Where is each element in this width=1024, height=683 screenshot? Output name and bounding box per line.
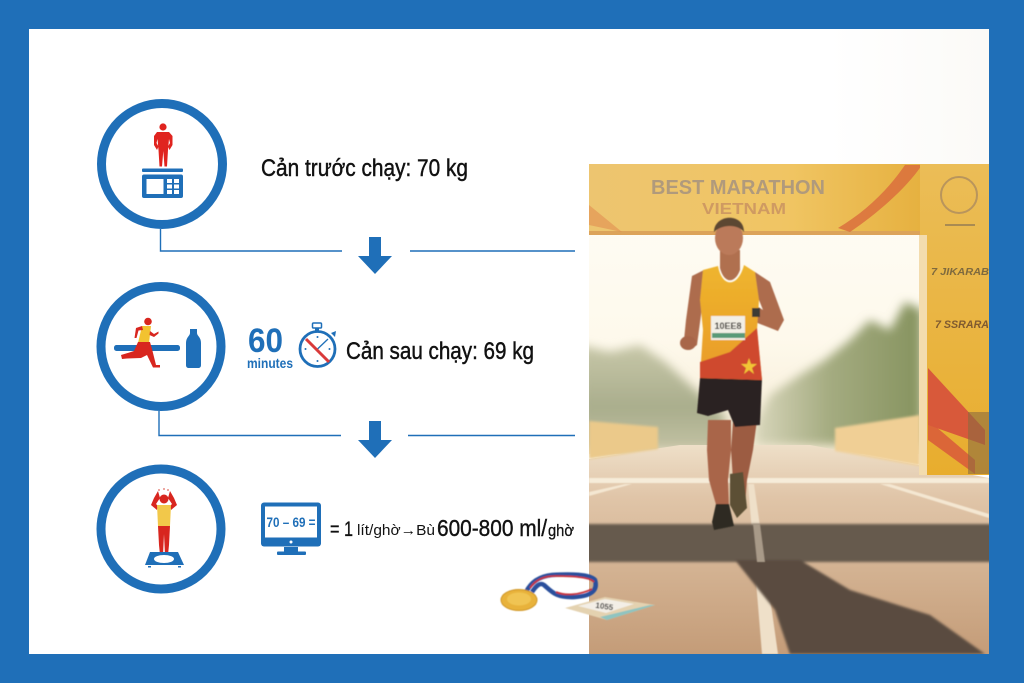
step 1 badge: person on scale	[102, 104, 222, 224]
photo runner: 10EE8	[714, 321, 742, 331]
photo arch pillar: 7 JIKARAB	[931, 267, 989, 278]
text: weight before: Cản trước chạy: 70 kg	[261, 155, 468, 182]
photo lane line over shadow	[753, 524, 765, 562]
connector 1	[160, 229, 575, 251]
runner tank top	[700, 265, 762, 380]
runner neck and head	[720, 250, 740, 280]
photo arch pillar: 7 SSRARA	[935, 319, 989, 331]
banner text: BEST MARATHON	[651, 177, 825, 199]
icon: bathroom scale	[145, 552, 184, 568]
runner front leg	[707, 420, 731, 508]
faded sky above the photo	[589, 29, 989, 164]
icon: race bib	[565, 597, 655, 620]
label: 60 minutes: 60	[248, 322, 283, 360]
photo arch banner: VIETNAM	[702, 201, 786, 218]
photo: runner at marathon finish arch	[580, 164, 1000, 654]
icon: gold medal	[501, 575, 596, 610]
icon: scale	[142, 168, 183, 198]
step 2 badge: runner and bottle	[101, 286, 221, 406]
icon: red person	[154, 123, 172, 166]
photo sky	[589, 235, 919, 454]
runner bib	[711, 316, 745, 340]
text: result and replenishment: ghờ	[548, 521, 574, 540]
monitor formula: 70 – 69 =	[266, 515, 316, 530]
runner arms	[684, 270, 704, 350]
photo barriers	[589, 415, 920, 466]
photo background trees	[580, 302, 922, 450]
icon: race bib: 1055	[595, 601, 614, 612]
arrow 2	[358, 421, 392, 458]
icon: computer monitor	[261, 502, 321, 555]
icon: water bottle	[186, 329, 201, 368]
runner watch	[752, 308, 760, 317]
icon: track bar	[114, 345, 180, 351]
connector 2	[159, 411, 575, 436]
text: result and replenishment: = 1	[330, 518, 353, 541]
runner shorts	[697, 378, 762, 427]
photo runner	[680, 218, 784, 530]
photo arch pillar	[919, 164, 989, 475]
label: 60 minutes	[247, 322, 293, 371]
label: 60 minutes: minutes	[247, 355, 293, 371]
text: result and replenishment: 600-800 ml/	[437, 515, 548, 541]
text: result and replenishment: lít/ghờ→Bù	[357, 522, 435, 539]
icon: stopwatch	[300, 323, 336, 366]
photo road	[589, 445, 989, 654]
photo road markings	[589, 478, 989, 654]
runner back leg	[731, 420, 757, 505]
photo shadow across road	[580, 524, 1000, 654]
arrow 1	[358, 237, 392, 274]
text: weight after: Cản sau chạy: 69 kg	[346, 338, 534, 365]
icon: running person	[121, 318, 160, 368]
step 3 badge: person on bathroom scale	[101, 469, 221, 589]
icon: worried person	[151, 488, 177, 555]
text: result and replenishment	[330, 515, 574, 541]
photo arch banner	[589, 164, 922, 235]
